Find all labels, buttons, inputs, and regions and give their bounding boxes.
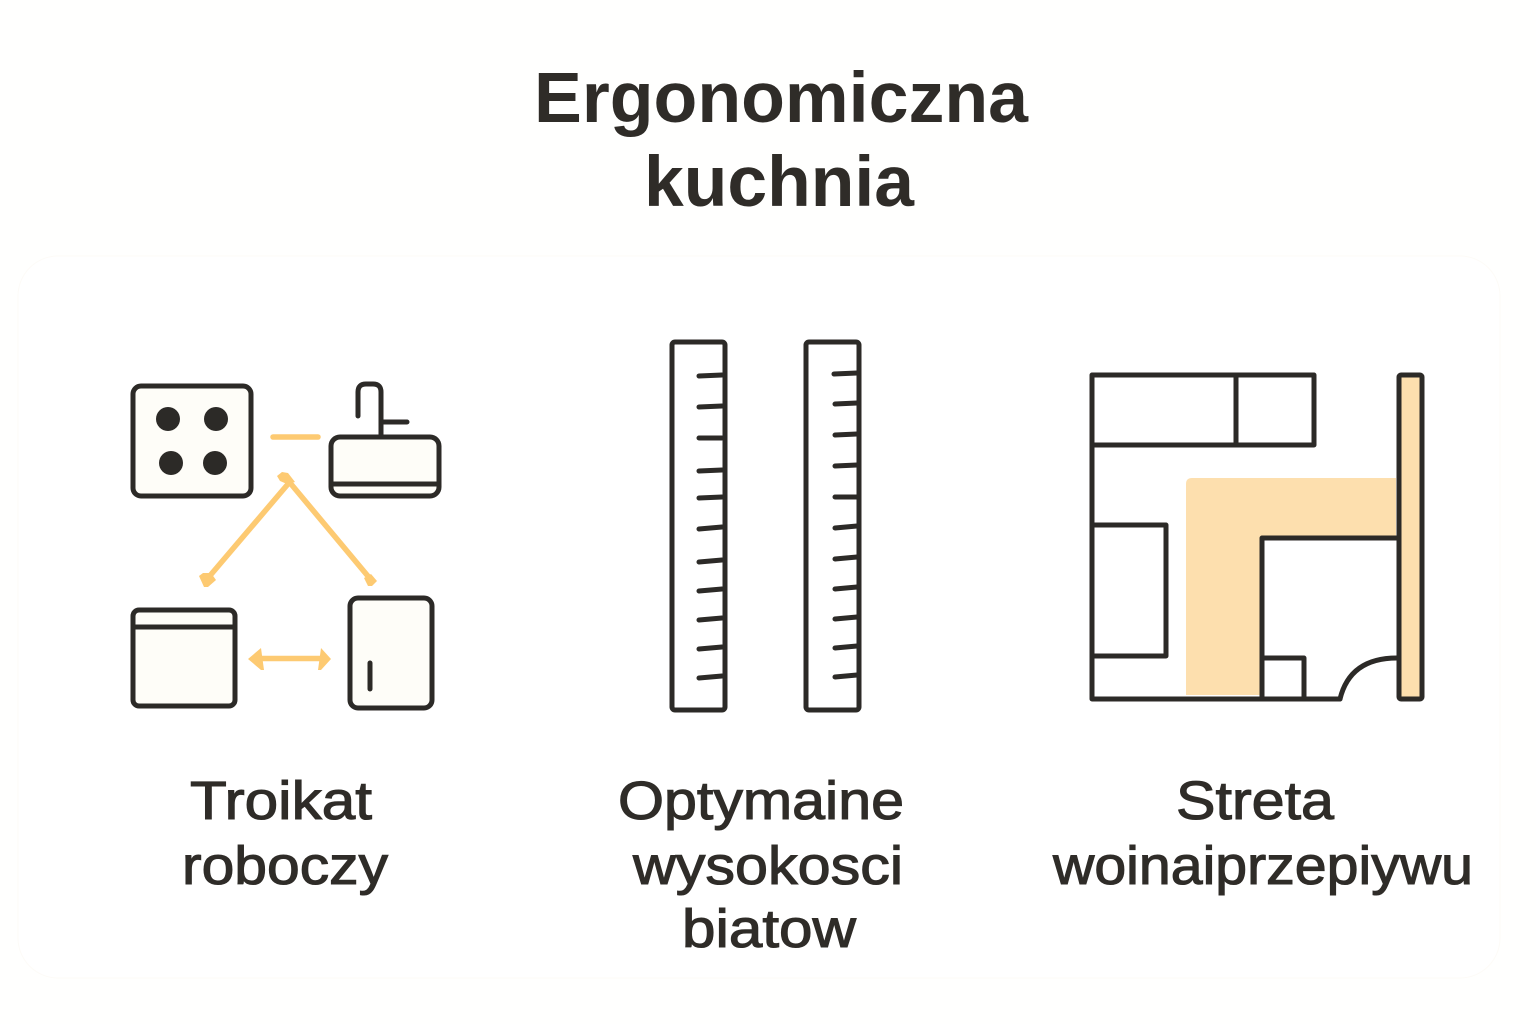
panel: background card (18, 256, 1500, 978)
label: optimal heights (618, 771, 904, 959)
upper cabinets (1092, 375, 1314, 445)
door swing (1340, 658, 1397, 699)
label: flow zone: Streta (1176, 771, 1335, 831)
icon: right ruler (806, 342, 859, 710)
title: Ergonomiczna (534, 59, 1029, 138)
small cabinet (1262, 658, 1304, 699)
icon: left ruler (672, 342, 725, 710)
label: work triangle: roboczy (182, 836, 388, 896)
icon: oven (133, 610, 235, 706)
label: optimal heights: biatow (682, 899, 857, 959)
flow zone highlight (1186, 478, 1396, 695)
label: work triangle (182, 771, 388, 896)
arrow: triangle apex to fridge (277, 472, 377, 586)
label: optimal heights: Optymaine (618, 771, 904, 831)
icon: floor plan (1092, 375, 1422, 699)
inner wall (1262, 538, 1397, 699)
outer wall (1092, 445, 1340, 699)
title (534, 59, 1029, 222)
wall strip (1399, 375, 1422, 699)
label: optimal heights: wysokosci (632, 836, 903, 896)
arrow: triangle apex to oven (199, 484, 288, 587)
title: kuchnia (644, 143, 915, 222)
arrow: stove to sink (273, 434, 318, 440)
icon: stove (133, 386, 251, 496)
icon: fridge (350, 598, 432, 708)
arrow: oven to fridge (248, 648, 331, 670)
counter block (1092, 525, 1166, 656)
label: flow zone (1052, 771, 1473, 896)
label: work triangle: Troikat (190, 771, 372, 831)
label: flow zone: woinaiprzepiywu (1052, 836, 1473, 896)
icon: work triangle (133, 384, 439, 708)
icon: sink (331, 384, 439, 496)
